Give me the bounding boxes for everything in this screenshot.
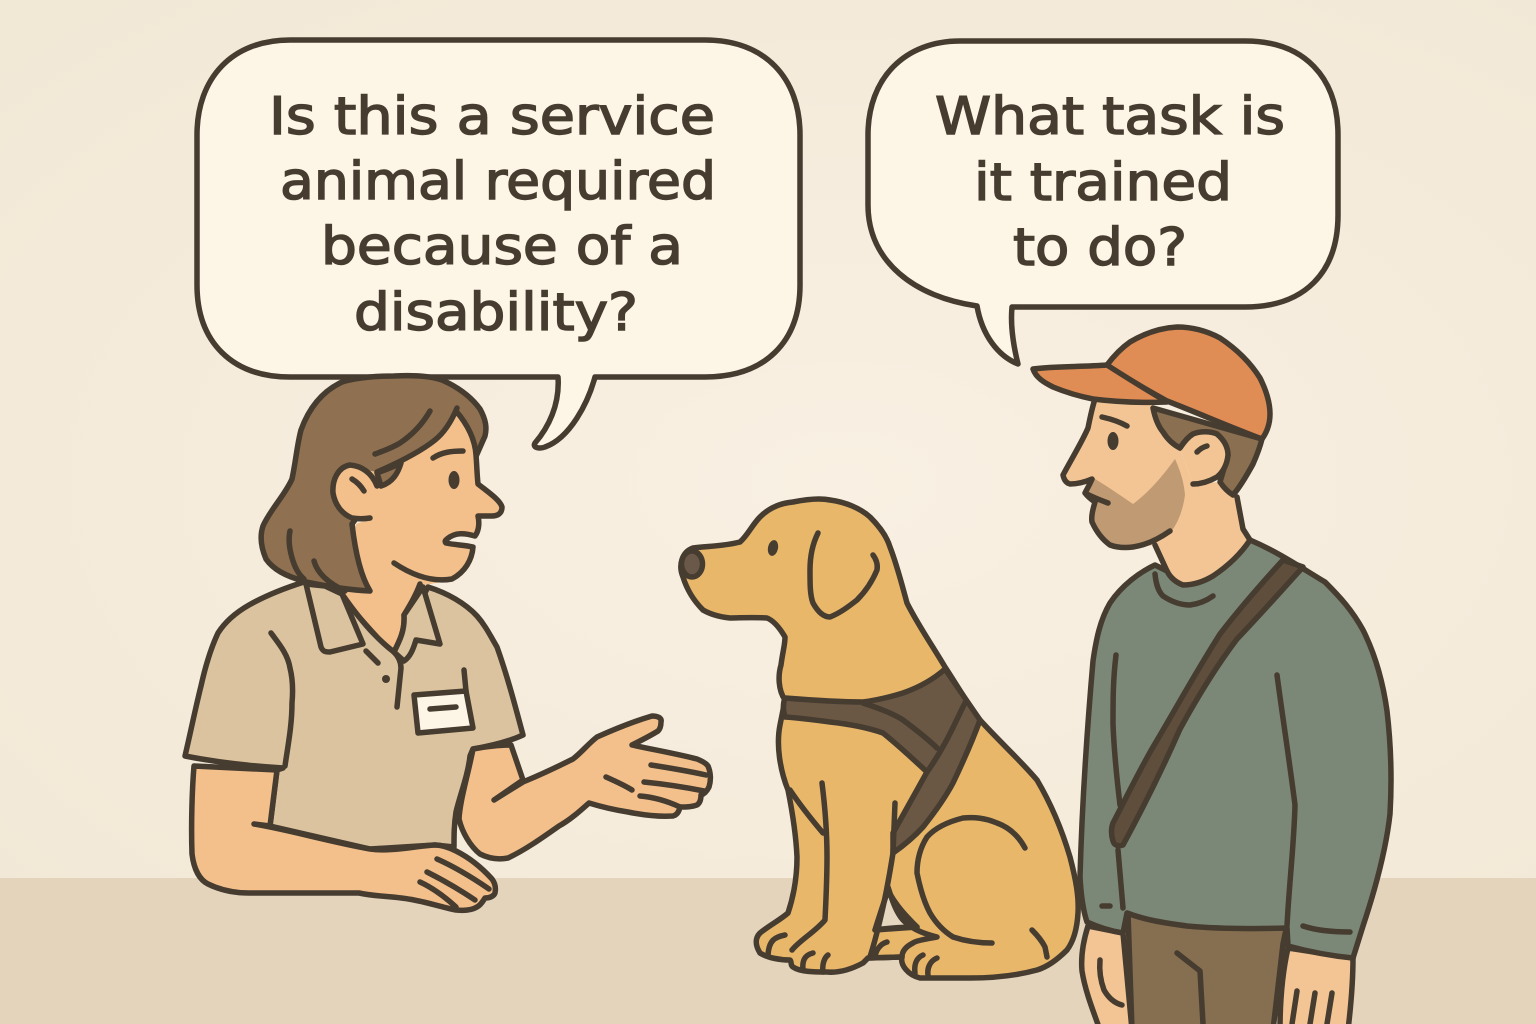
ear (810, 533, 877, 617)
head and neck skin (1063, 399, 1250, 585)
left hand (1082, 926, 1132, 1024)
floor gap between legs (875, 890, 917, 930)
neck edges (342, 584, 420, 652)
lower hair lock over neck (289, 522, 370, 591)
ear (333, 465, 377, 519)
bag strap (1112, 560, 1303, 846)
face outline (394, 411, 502, 580)
question text right: What task is (935, 87, 1285, 147)
right hand (1280, 948, 1353, 1024)
guide dog (681, 499, 1078, 978)
question text left: disability? (354, 283, 638, 343)
harness (784, 669, 980, 853)
face outline (1063, 399, 1170, 548)
face details (352, 451, 463, 491)
hair strand upper (375, 411, 430, 454)
hair (261, 376, 486, 591)
collar (306, 584, 440, 661)
upper arm on counter (192, 766, 495, 910)
small hair piece (377, 463, 401, 486)
sweater details (1102, 574, 1350, 932)
floor counter (0, 878, 1536, 1024)
hairline (377, 408, 457, 472)
leg and haunch lines (768, 783, 1047, 975)
extended arm and hand (459, 716, 710, 859)
speech bubble left (197, 40, 800, 448)
skin at neck above collars (342, 570, 420, 652)
pants (1128, 913, 1287, 1024)
man (1033, 327, 1391, 1024)
eye (766, 539, 780, 557)
pants crease (1177, 953, 1203, 1024)
shirt details (271, 633, 466, 766)
neck outline (1155, 497, 1250, 571)
question text left: animal required (280, 152, 716, 212)
ear (1180, 432, 1228, 484)
palm lines (606, 765, 706, 807)
cap (1033, 327, 1270, 439)
sweater (1080, 540, 1391, 958)
counter hand fingers (420, 859, 489, 907)
face and neck skin (342, 411, 502, 652)
nose (682, 551, 702, 577)
eye and brow (1102, 417, 1127, 450)
question text right: to do? (1013, 218, 1187, 278)
woman staff member (185, 376, 710, 910)
question text left: Is this a service (269, 87, 715, 147)
question text left: because of a (321, 217, 683, 277)
question text right: it trained (974, 153, 1232, 213)
speech bubble right (868, 41, 1338, 364)
polo shirt (185, 582, 523, 849)
beard (1085, 459, 1185, 547)
back hair (1153, 408, 1262, 495)
dog body and head (681, 499, 1078, 978)
name badge (414, 691, 473, 733)
